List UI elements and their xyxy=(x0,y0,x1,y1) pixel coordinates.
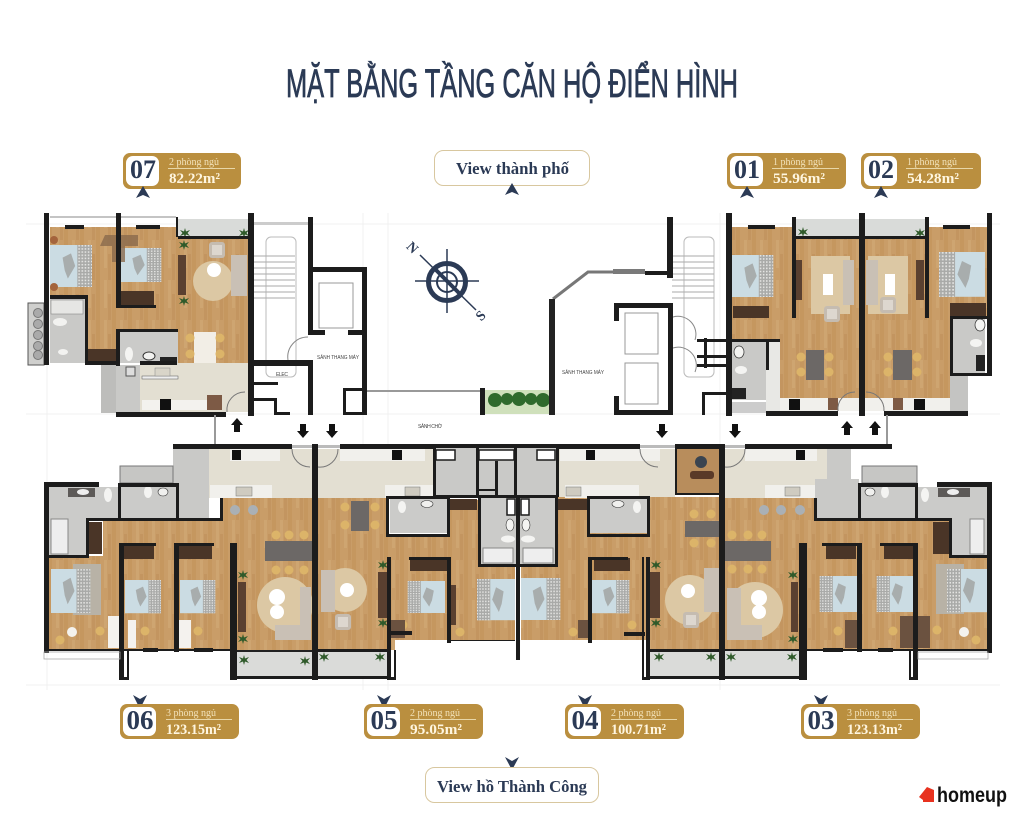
faint drawing grid xyxy=(26,213,1000,690)
core left: stairs, lift lobby: SẢNH CHỜ xyxy=(418,423,443,430)
view label: lake: View hồ Thành Công xyxy=(437,777,587,796)
view label: lake xyxy=(426,757,598,802)
badge 01: 55.96m² xyxy=(773,171,826,187)
badge 01: 1 phòng ngủ xyxy=(773,156,823,168)
badge 06 xyxy=(120,695,239,739)
badge 06: 06 xyxy=(126,705,154,735)
core left: stairs, lift lobby: ELEC xyxy=(276,372,288,378)
badge 05 xyxy=(364,695,483,739)
badge 02: 1 phòng ngủ xyxy=(907,156,957,168)
compass: S xyxy=(473,308,490,324)
badge 07: 2 phòng ngủ xyxy=(169,156,219,168)
badge 07: 82.22m² xyxy=(169,171,220,187)
central service core and bathrooms xyxy=(433,448,559,660)
badge 01 xyxy=(727,153,846,198)
badge 04 xyxy=(565,695,684,739)
badge 07: 07 xyxy=(130,155,156,184)
badge 05: 05 xyxy=(370,705,398,735)
floor plan: apartment 04 xyxy=(521,444,725,680)
floor plan: apartment 02 xyxy=(859,213,992,416)
planter xyxy=(480,388,555,415)
badge 02: 02 xyxy=(868,155,894,184)
floor plan: apartment 06 xyxy=(44,444,318,680)
title: MẶT BẰNG TẦNG CĂN HỘ ĐIỂN HÌNH xyxy=(286,59,738,106)
view label: city xyxy=(434,150,590,195)
badge 02 xyxy=(861,153,981,198)
badge 04: 04 xyxy=(572,705,598,735)
badge 03 xyxy=(801,695,920,739)
badge 05: 95.05m² xyxy=(410,722,463,738)
floor plan: apartment 05 xyxy=(318,449,515,680)
core right: stairs, two lifts: SẢNH THANG MÁY xyxy=(562,369,605,376)
badge 03: 03 xyxy=(808,705,834,735)
badge 03: 123.13m² xyxy=(847,722,902,738)
badge 04: 100.71m² xyxy=(611,722,666,738)
badge 02: 54.28m² xyxy=(907,171,960,187)
badge 06: 123.15m² xyxy=(166,722,221,738)
compass xyxy=(403,239,490,324)
core right: stairs, two lifts xyxy=(549,217,766,415)
badge 05: 2 phòng ngủ xyxy=(410,707,460,719)
badge 06: 3 phòng ngủ xyxy=(166,707,216,719)
floor plan: apartment 07 xyxy=(28,213,254,417)
badge 01: 01 xyxy=(734,155,760,184)
view label: city: View thành phố xyxy=(456,159,569,178)
core left: stairs, lift lobby xyxy=(254,217,480,430)
core left: stairs, lift lobby: SẢNH THANG MÁY xyxy=(317,354,360,361)
badge 07 xyxy=(123,153,241,198)
badge 04: 2 phòng ngủ xyxy=(611,707,661,719)
logo: homeup: homeup xyxy=(937,784,1007,807)
entry arrows xyxy=(231,418,881,438)
floor plan: apartment 03 xyxy=(725,449,992,680)
corridor wall xyxy=(173,415,892,449)
floor plan: apartment 01 xyxy=(726,213,859,416)
compass: N xyxy=(403,239,421,257)
badge 03: 3 phòng ngủ xyxy=(847,707,897,719)
